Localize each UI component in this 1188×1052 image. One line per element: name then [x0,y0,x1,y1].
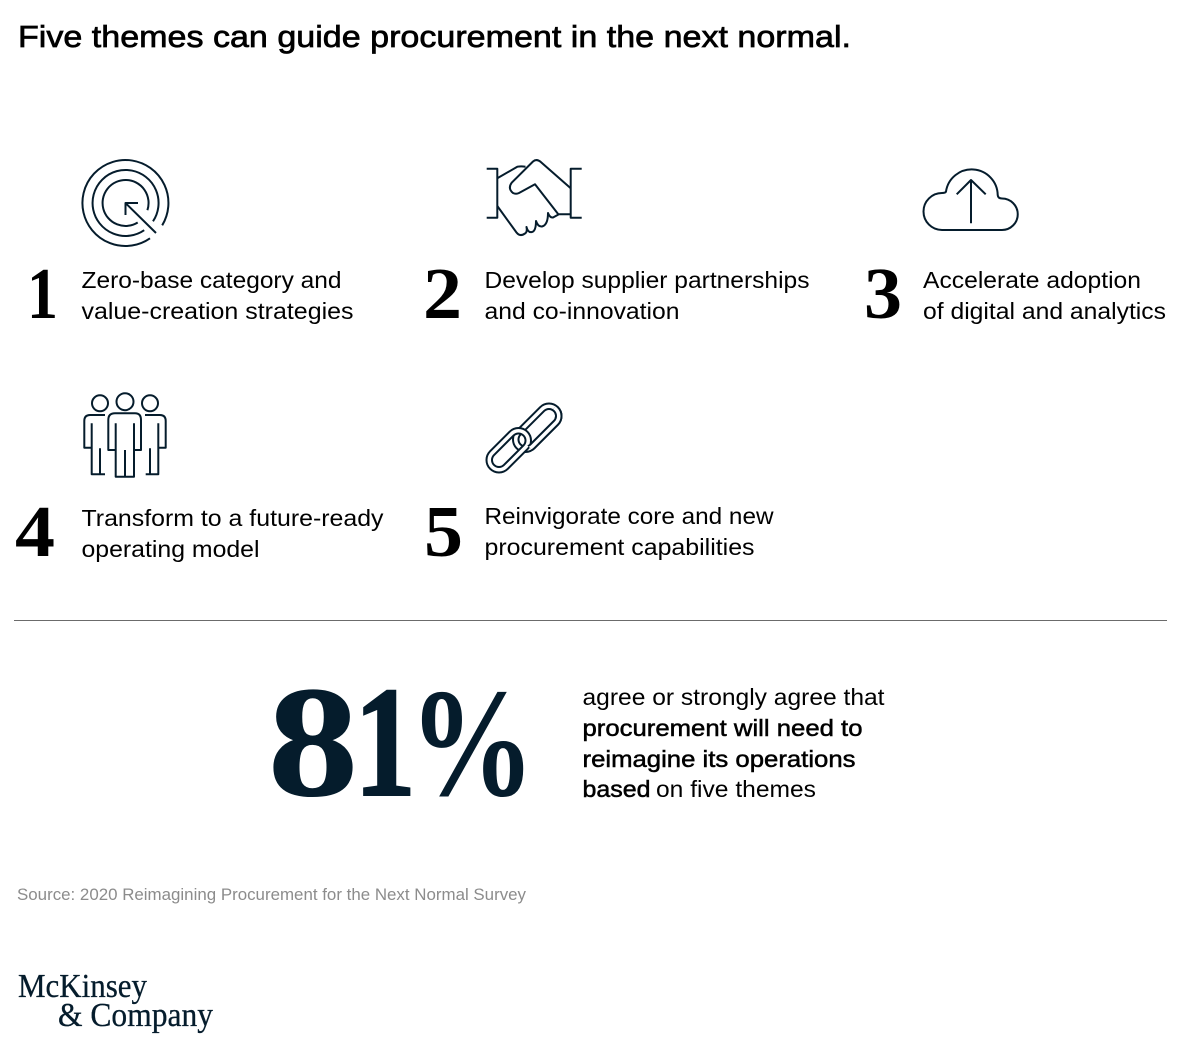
number 4: 4 [15,491,55,572]
big number: 8 [268,655,358,830]
big number [268,655,535,830]
label 3: of digital and analytics [923,298,1166,324]
icon: three people [84,393,166,477]
icon: handshake [487,160,582,235]
logo: McKinsey & Company: & Company [58,997,213,1034]
label 1: value-creation strategies [82,298,354,324]
callout text: reimagine its operations [582,746,856,772]
theme 1: zero-base strategies [27,160,354,334]
callout text: based [582,776,650,802]
callout text: on five themes [656,776,816,802]
icon: target with arrow [82,160,168,246]
theme 2: supplier partnerships [423,160,810,334]
theme 3: digital and analytics [864,169,1166,334]
label 4: operating model [82,536,260,562]
source note: Source: 2020 Reimagining Procurement for the Next Normal Survey [17,886,527,904]
label 5: Reinvigorate core and new [484,503,774,529]
label 4: Transform to a future-ready [82,505,384,531]
number 1: 1 [27,253,58,334]
big number: 1 [354,655,416,830]
logo: McKinsey & Company [18,968,213,1034]
big number: % [409,657,535,829]
theme 4: operating model [15,393,384,572]
theme 5: procurement capabilities [424,406,774,572]
callout text: agree or strongly agree that [582,684,885,710]
number 5: 5 [424,491,463,572]
icon: cloud upload [924,169,1018,230]
number 3: 3 [864,253,902,334]
logo: McKinsey & Company: McKinsey [18,968,147,1005]
callout: 81% statistic [268,655,885,830]
label 5: procurement capabilities [484,534,754,560]
number 2: 2 [423,253,462,334]
label 3: Accelerate adoption [923,267,1141,293]
title: Five themes can guide procurement in the next normal. [18,19,851,54]
label 1: Zero-base category and [82,267,342,293]
label 2: Develop supplier partnerships [484,267,810,293]
label 2: and co-innovation [484,298,680,324]
icon: chain link [489,406,559,470]
callout text: procurement will need to [582,715,862,741]
